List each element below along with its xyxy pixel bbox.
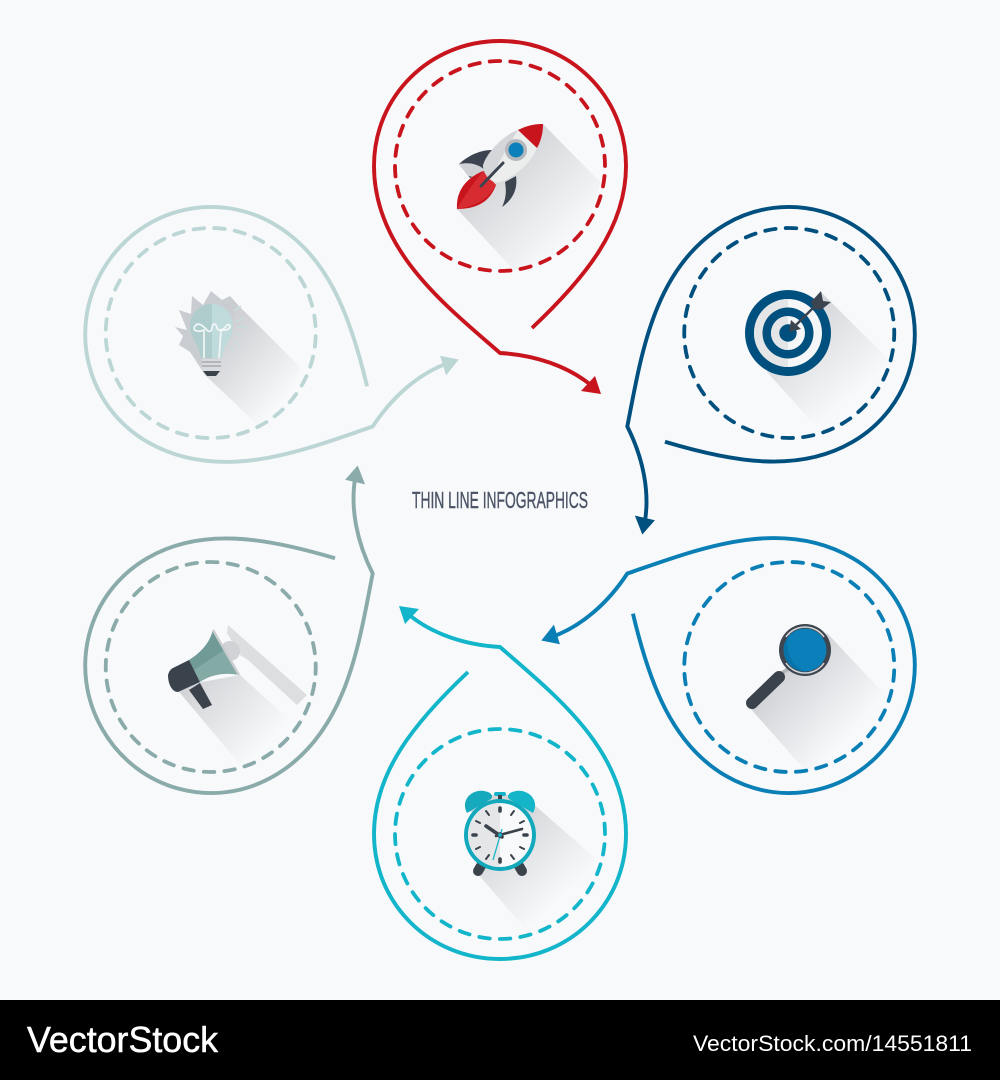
red dashed circle	[395, 61, 605, 271]
grey-green dashed circle	[67, 524, 354, 810]
step 2: target (dark blue)	[529, 161, 961, 556]
icon: alarm clock	[464, 791, 595, 934]
blue teardrop outline with arrow	[529, 444, 961, 839]
blue dashed circle	[646, 524, 933, 810]
step 5: megaphone (grey-green)	[39, 444, 471, 839]
watermark url: VectorStock.com/14551811	[693, 1031, 972, 1056]
watermark logo text: VectorStock	[27, 1019, 219, 1060]
icon: rocket	[457, 124, 600, 270]
step 1: rocket (red)	[374, 41, 626, 394]
cyan dashed circle	[395, 729, 605, 939]
icon: light bulb	[175, 291, 300, 425]
step 4: alarm clock (cyan)	[374, 606, 626, 959]
icon: magnifying glass	[750, 624, 887, 770]
step 3: magnifier (blue)	[529, 444, 961, 839]
title: thin line infographics: THIN LINE INFOGRAPHICS	[412, 487, 588, 513]
red teardrop outline with arrow	[374, 41, 626, 394]
dark blue teardrop outline with arrow	[529, 161, 961, 556]
pale teal dashed circle	[67, 190, 354, 476]
icon: target with dart	[745, 290, 887, 433]
grey-green teardrop outline with arrow	[39, 444, 471, 839]
icon: megaphone	[168, 625, 307, 768]
watermark bar	[0, 1000, 1000, 1080]
pale teal teardrop outline with arrow	[39, 161, 471, 556]
step 6: light bulb (pale teal)	[39, 161, 471, 556]
dark blue dashed circle	[646, 190, 933, 476]
cyan teardrop outline with arrow	[374, 606, 626, 959]
